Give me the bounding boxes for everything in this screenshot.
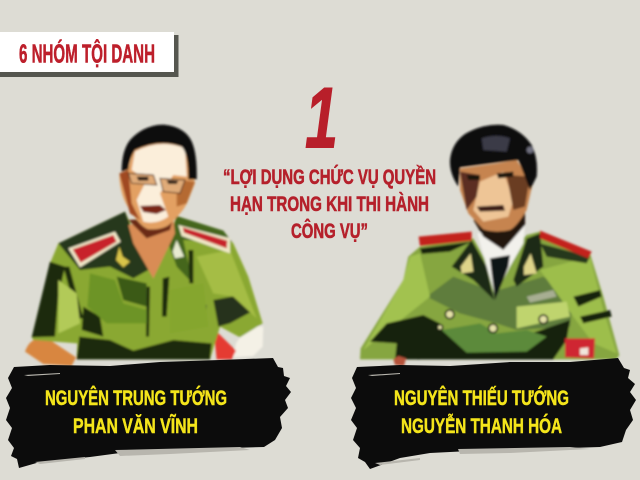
hand bbox=[393, 356, 406, 366]
uniform body bbox=[32, 212, 263, 359]
mouth bbox=[140, 205, 166, 214]
hair bbox=[122, 125, 197, 179]
quote: charge description: CÔNG VỤ” bbox=[291, 218, 368, 243]
big number 1: 1 bbox=[305, 70, 338, 166]
name banner: Nguyễn Thanh Hóa: NGUYỄN THANH HÓA bbox=[401, 412, 562, 438]
white shirt and tie bbox=[477, 225, 525, 297]
quote: charge description bbox=[223, 164, 436, 243]
neck bbox=[128, 218, 175, 278]
ink brush stroke left bbox=[6, 358, 291, 468]
portrait: right officer in green uniform bbox=[360, 125, 619, 366]
brush streaks bbox=[24, 373, 250, 464]
uniform body bbox=[360, 232, 619, 359]
lower belly panel bbox=[442, 323, 547, 353]
quote: charge description: “LỢI DỤNG CHỨC VỤ QUYỀN bbox=[223, 164, 436, 189]
ink brush stroke right bbox=[351, 358, 636, 469]
portrait: left officer in green uniform bbox=[25, 125, 263, 366]
medal ribbon bbox=[527, 290, 557, 303]
collar insignia bbox=[461, 253, 473, 273]
name banner: Phan Văn Vĩnh: PHAN VĂN VĨNH bbox=[73, 413, 198, 438]
face bbox=[460, 160, 532, 232]
eyes and mouth bbox=[467, 172, 513, 180]
name banner: Phan Văn Vĩnh: NGUYÊN TRUNG TƯỚNG bbox=[45, 385, 227, 410]
red object on table bbox=[565, 338, 595, 358]
quote: charge description: HẠN TRONG KHI THI HÀNH bbox=[230, 191, 429, 216]
right hand and cuff bbox=[233, 326, 263, 357]
uniform shadows bbox=[32, 212, 252, 359]
buttons bbox=[437, 310, 548, 333]
heading tag: 6 nhóm tội danh bbox=[0, 32, 178, 77]
uniform highlights bbox=[87, 273, 147, 323]
name banner: Nguyễn Thanh Hóa bbox=[351, 358, 636, 469]
neck bbox=[473, 210, 525, 250]
hair bbox=[450, 125, 537, 190]
red epaulets bbox=[68, 232, 121, 267]
left forearm bbox=[25, 339, 76, 366]
name banner: Phan Văn Vĩnh bbox=[6, 358, 291, 468]
uniform dark shadows bbox=[370, 233, 612, 359]
brush streaks bbox=[368, 373, 590, 465]
red epaulets bbox=[419, 232, 472, 246]
collar insignia bbox=[116, 247, 130, 267]
heading tag: 6 nhóm tội danh: 6 NHÓM TỘI DANH bbox=[19, 38, 155, 68]
uniform mid tones bbox=[427, 277, 573, 330]
name banner: Nguyễn Thanh Hóa: NGUYÊN THIẾU TƯỚNG bbox=[394, 385, 569, 410]
face bbox=[119, 141, 195, 229]
glasses and eyes bbox=[128, 173, 185, 193]
